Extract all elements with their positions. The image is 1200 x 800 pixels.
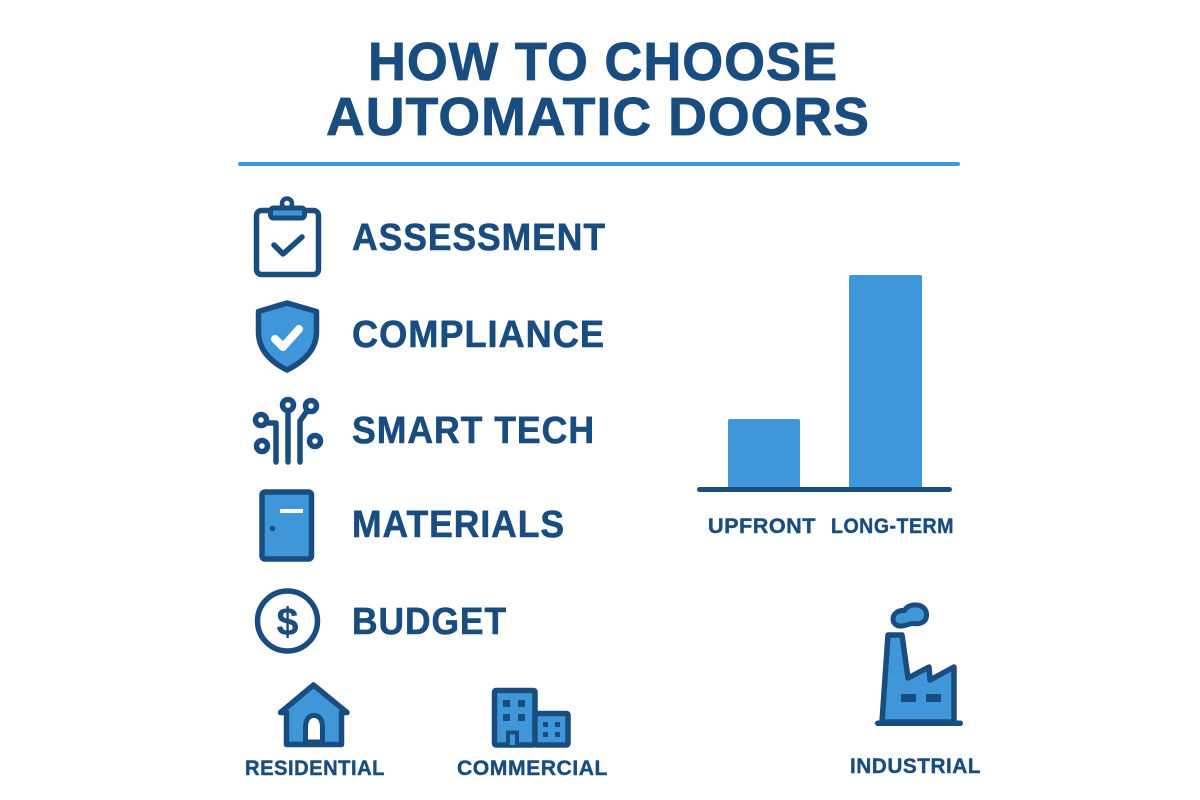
icon: dollar coin (258, 591, 318, 651)
cost bar chart (697, 275, 954, 538)
icon: factory (875, 605, 963, 726)
label: residential: RESIDENTIAL (245, 757, 385, 780)
label: assessment: ASSESSMENT (352, 217, 606, 259)
icon: circuit (256, 400, 320, 462)
title: HOW TO CHOOSE (368, 32, 838, 92)
icon: house (280, 685, 347, 747)
label: long-term: LONG-TERM (831, 515, 954, 538)
icon: shield (258, 303, 316, 370)
label: industrial: INDUSTRIAL (850, 755, 981, 778)
title: AUTOMATIC DOORS (326, 87, 870, 147)
icon: clipboard (256, 198, 318, 274)
bar: long-term (849, 275, 922, 489)
label: upfront: UPFRONT (708, 515, 816, 538)
icon: dollar coin: $ (277, 601, 299, 644)
icon: door (262, 492, 312, 559)
icon: office buildings (494, 690, 568, 745)
label: compliance: COMPLIANCE (352, 314, 605, 356)
label: materials: MATERIALS (352, 504, 565, 546)
title (326, 32, 870, 147)
bar: upfront (728, 419, 800, 489)
label: commercial: COMMERCIAL (457, 757, 608, 780)
smoke (893, 605, 927, 626)
label: smart tech: SMART TECH (352, 410, 595, 452)
label: budget: BUDGET (352, 601, 507, 643)
